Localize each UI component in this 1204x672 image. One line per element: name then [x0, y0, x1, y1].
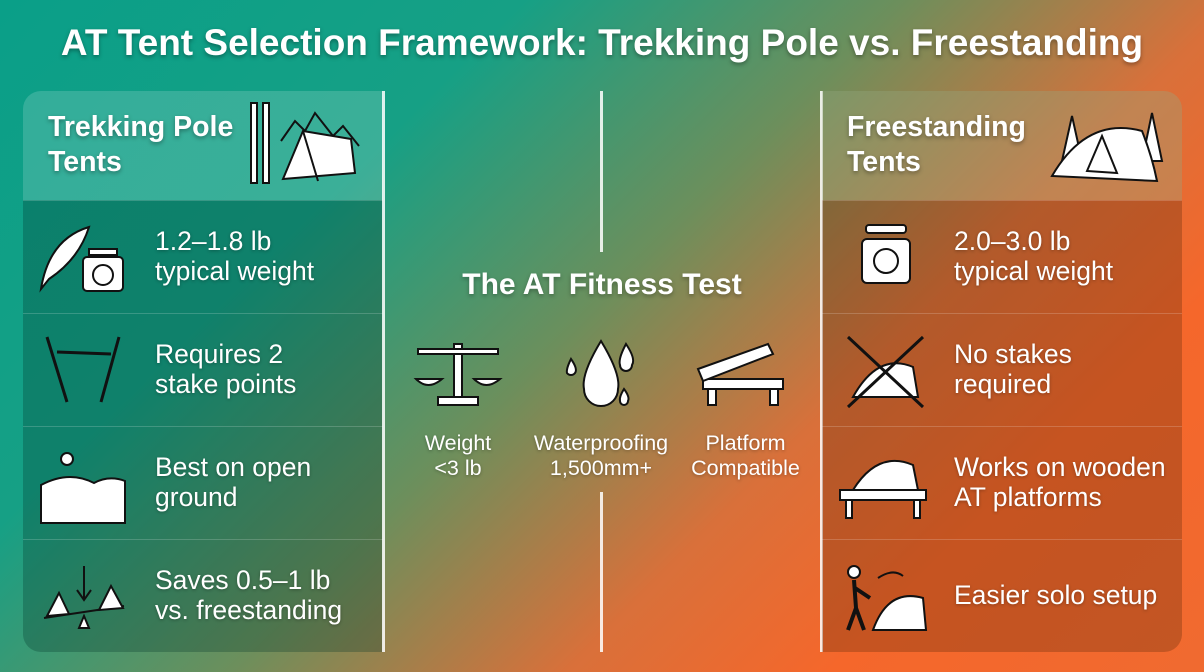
header: freestanding tents: Freestanding: [847, 111, 1026, 143]
row: weight: typical weight: [155, 256, 314, 286]
header: freestanding tents: Tents: [847, 146, 921, 178]
criterion: weight: [414, 343, 503, 480]
row: platforms: AT platforms: [954, 482, 1102, 512]
row: stakes: stake points: [155, 369, 296, 399]
icon: feather and scale: [40, 226, 124, 292]
row: weight: 2.0–3.0 lb: [954, 226, 1070, 256]
icon: balance: [414, 343, 503, 406]
row: saves weight: Saves 0.5–1 lb: [155, 565, 330, 595]
icon: tent on platform: [839, 460, 927, 519]
row: no stakes: [822, 313, 1182, 426]
icon: drops: [566, 339, 634, 407]
row: saves weight: vs. freestanding: [155, 595, 342, 625]
divider lines: [382, 91, 385, 652]
icon: platform: [696, 342, 784, 406]
panel: freestanding tents: [822, 91, 1182, 652]
row: solo setup: [822, 539, 1182, 652]
criterion: platform: Platform: [705, 431, 786, 455]
row: open ground: ground: [155, 482, 238, 512]
row: stakes: [23, 313, 383, 426]
row: platforms: [822, 426, 1182, 539]
row: stakes: Requires 2: [155, 339, 283, 369]
row: open ground: [23, 426, 383, 539]
criterion: waterproofing: [534, 339, 668, 480]
header: trekking pole tents: [23, 91, 383, 200]
icon: scale: [861, 224, 911, 284]
panel: trekking pole tents: [23, 91, 382, 652]
row: weight: [822, 200, 1182, 313]
row: no stakes: required: [954, 369, 1051, 399]
icon: poles and tent: [250, 102, 360, 184]
icon: landscape: [40, 452, 126, 524]
icon: dome tent and trees: [1050, 112, 1164, 182]
title: AT Tent Selection Framework: Trekking Pole vs. Freestanding: [61, 22, 1143, 63]
criterion: waterproofing: 1,500mm+: [550, 456, 652, 480]
header: freestanding tents: [822, 91, 1182, 200]
row: weight: 1.2–1.8 lb: [155, 226, 271, 256]
row: saves weight: [23, 539, 383, 652]
criterion: platform: Compatible: [691, 456, 800, 480]
heading: AT fitness test: The AT Fitness Test: [462, 268, 742, 301]
icon: person setting up tent: [846, 565, 928, 631]
row: open ground: Best on open: [155, 452, 311, 482]
row: platforms: Works on wooden: [954, 452, 1166, 482]
row: weight: [23, 200, 383, 313]
criterion: platform: [690, 342, 800, 482]
icon: seesaw tents: [44, 566, 124, 629]
row: no stakes: No stakes: [954, 339, 1072, 369]
icon: crossed out tent: [847, 336, 924, 408]
icon: stakes: [46, 336, 120, 402]
header: trekking pole tents: Trekking Pole: [48, 111, 233, 143]
header: trekking pole tents: Tents: [48, 146, 122, 178]
row: solo setup: Easier solo setup: [954, 580, 1157, 610]
criterion: weight: Weight: [425, 431, 491, 455]
row: weight: typical weight: [954, 256, 1113, 286]
criterion: waterproofing: Waterproofing: [534, 431, 668, 455]
criterion: weight: <3 lb: [434, 456, 482, 480]
